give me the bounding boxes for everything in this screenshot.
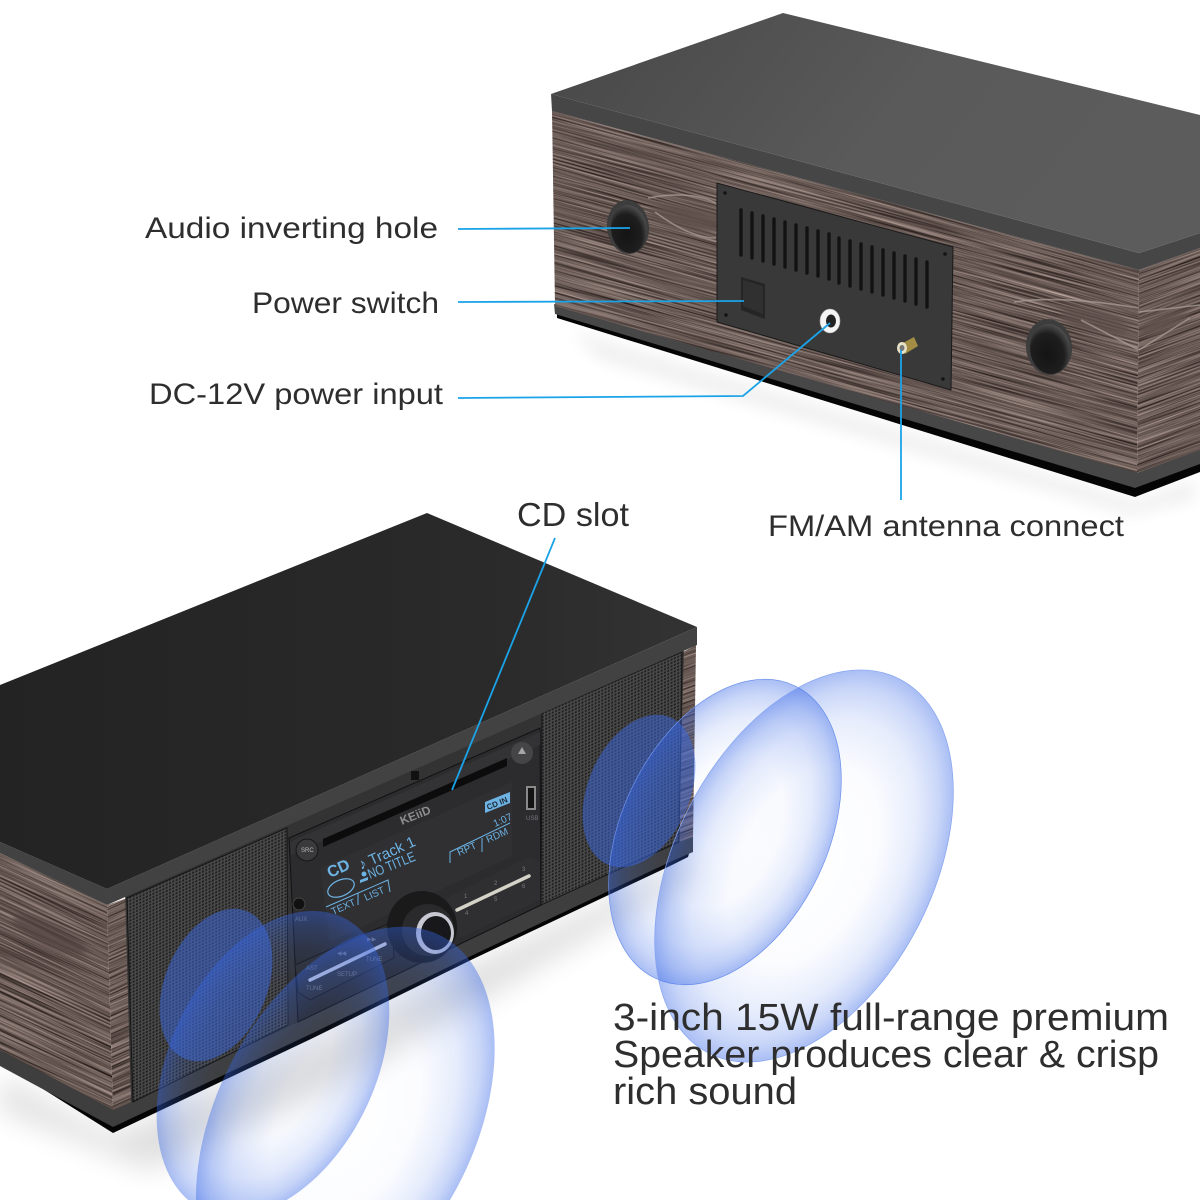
media button strip: TUNE <box>306 986 322 992</box>
preset button strip: 5 <box>494 897 498 903</box>
brand logo: KEiiD <box>398 803 433 828</box>
wood back face <box>552 111 1139 473</box>
top panel edge <box>551 94 1200 270</box>
speaker description text: Speaker produces clear & crisp <box>613 1034 1159 1076</box>
callout line: CD slot <box>452 538 555 790</box>
front fascia <box>125 644 684 1102</box>
sound wave right: outer lobe <box>594 620 1014 1112</box>
TEXT LIST tabs <box>326 880 390 918</box>
label: audio inverting hole: Audio inverting hole <box>145 212 438 245</box>
CD label: CD <box>325 857 353 882</box>
sound wave left: inner lobe <box>138 891 294 1079</box>
preset button strip: 3 <box>522 867 526 873</box>
sound wave left: middle lobe <box>157 911 389 1200</box>
sound wave left: outer lobe <box>196 927 495 1200</box>
speaker description text <box>613 997 1169 1113</box>
power switch <box>741 277 765 319</box>
base shadow edge <box>0 840 693 1133</box>
wood right strip <box>680 646 696 842</box>
display window <box>320 782 512 942</box>
preset button strip: 4 <box>465 911 469 917</box>
bass port left <box>604 198 652 256</box>
AUX jack: AUX <box>295 917 307 923</box>
rear speaker unit <box>551 13 1200 497</box>
wood side face <box>1137 248 1200 473</box>
media button strip: AST <box>306 966 318 972</box>
plate screws <box>723 191 947 381</box>
media button strip: ◀◀ <box>337 951 347 957</box>
speaker description text: 3-inch 15W full-range premium <box>613 997 1169 1039</box>
wood left side face <box>0 853 113 1110</box>
top panel surface <box>551 13 1200 253</box>
speaker description text: rich sound <box>613 1071 797 1113</box>
base shadow edge <box>557 305 1200 497</box>
USB port <box>526 786 538 822</box>
RPT RDM tabs <box>450 823 510 863</box>
ventilation slots <box>741 210 927 307</box>
label: CD slot: CD slot <box>517 496 629 533</box>
media button strip: TUNE <box>366 957 382 963</box>
label: DC power input: DC-12V power input <box>149 378 444 411</box>
base plinth <box>0 833 693 1127</box>
TEXT LIST tabs: LIST <box>363 885 387 904</box>
RPT RDM tabs: RDM <box>485 826 510 846</box>
control panel <box>289 728 541 1022</box>
speaker grille right <box>541 652 682 905</box>
bass port right <box>1023 317 1075 377</box>
TEXT LIST tabs: TEXT <box>330 897 358 918</box>
callout line: power switch <box>458 301 744 302</box>
base plinth <box>554 304 1200 488</box>
sound wave right: inner lobe <box>561 697 717 885</box>
track line: ♪ Track 1 <box>356 833 418 874</box>
USB port: USB <box>526 816 538 822</box>
person icon and title <box>360 848 417 883</box>
preset button strip: 1 <box>464 894 468 900</box>
antenna connector <box>897 337 918 354</box>
media button strip: SETUP <box>337 972 357 978</box>
rear connector plate <box>717 183 953 390</box>
sound wave right: middle lobe <box>562 641 888 1023</box>
CD slot <box>323 758 507 847</box>
wood corner strip <box>107 898 131 1110</box>
speaker grille left <box>127 828 288 1102</box>
floor shadow: rear unit <box>570 330 1195 515</box>
disc icon <box>325 875 357 901</box>
top panel surface <box>0 513 697 889</box>
person icon and title: NO TITLE <box>365 848 417 882</box>
callout line: antenna <box>900 350 902 500</box>
source button: SRC <box>301 848 314 854</box>
CD tray lip <box>290 732 540 855</box>
callout line: DC input <box>458 323 830 398</box>
preset button strip <box>446 857 540 938</box>
AUX jack <box>293 898 307 923</box>
floor shadow: front unit <box>0 860 695 1170</box>
RPT RDM tabs: RPT <box>456 841 478 859</box>
media button strip <box>295 922 394 1000</box>
CD IN badge: CD IN <box>485 795 509 812</box>
preset button strip: 6 <box>522 884 526 890</box>
preset button strip: 2 <box>494 881 498 887</box>
label: power switch: Power switch <box>252 287 439 320</box>
time readout: 1:07 <box>492 812 514 830</box>
media button strip: ▶▶ <box>367 937 377 943</box>
label: antenna connect: FM/AM antenna connect <box>768 510 1125 543</box>
front speaker unit <box>0 513 846 1133</box>
eject button <box>511 742 533 764</box>
DC jack <box>820 309 840 333</box>
volume knob <box>387 891 457 963</box>
source button <box>296 839 318 861</box>
top panel edge <box>0 627 697 905</box>
callout line: audio inverting hole <box>458 228 630 229</box>
slot latch <box>411 771 419 780</box>
